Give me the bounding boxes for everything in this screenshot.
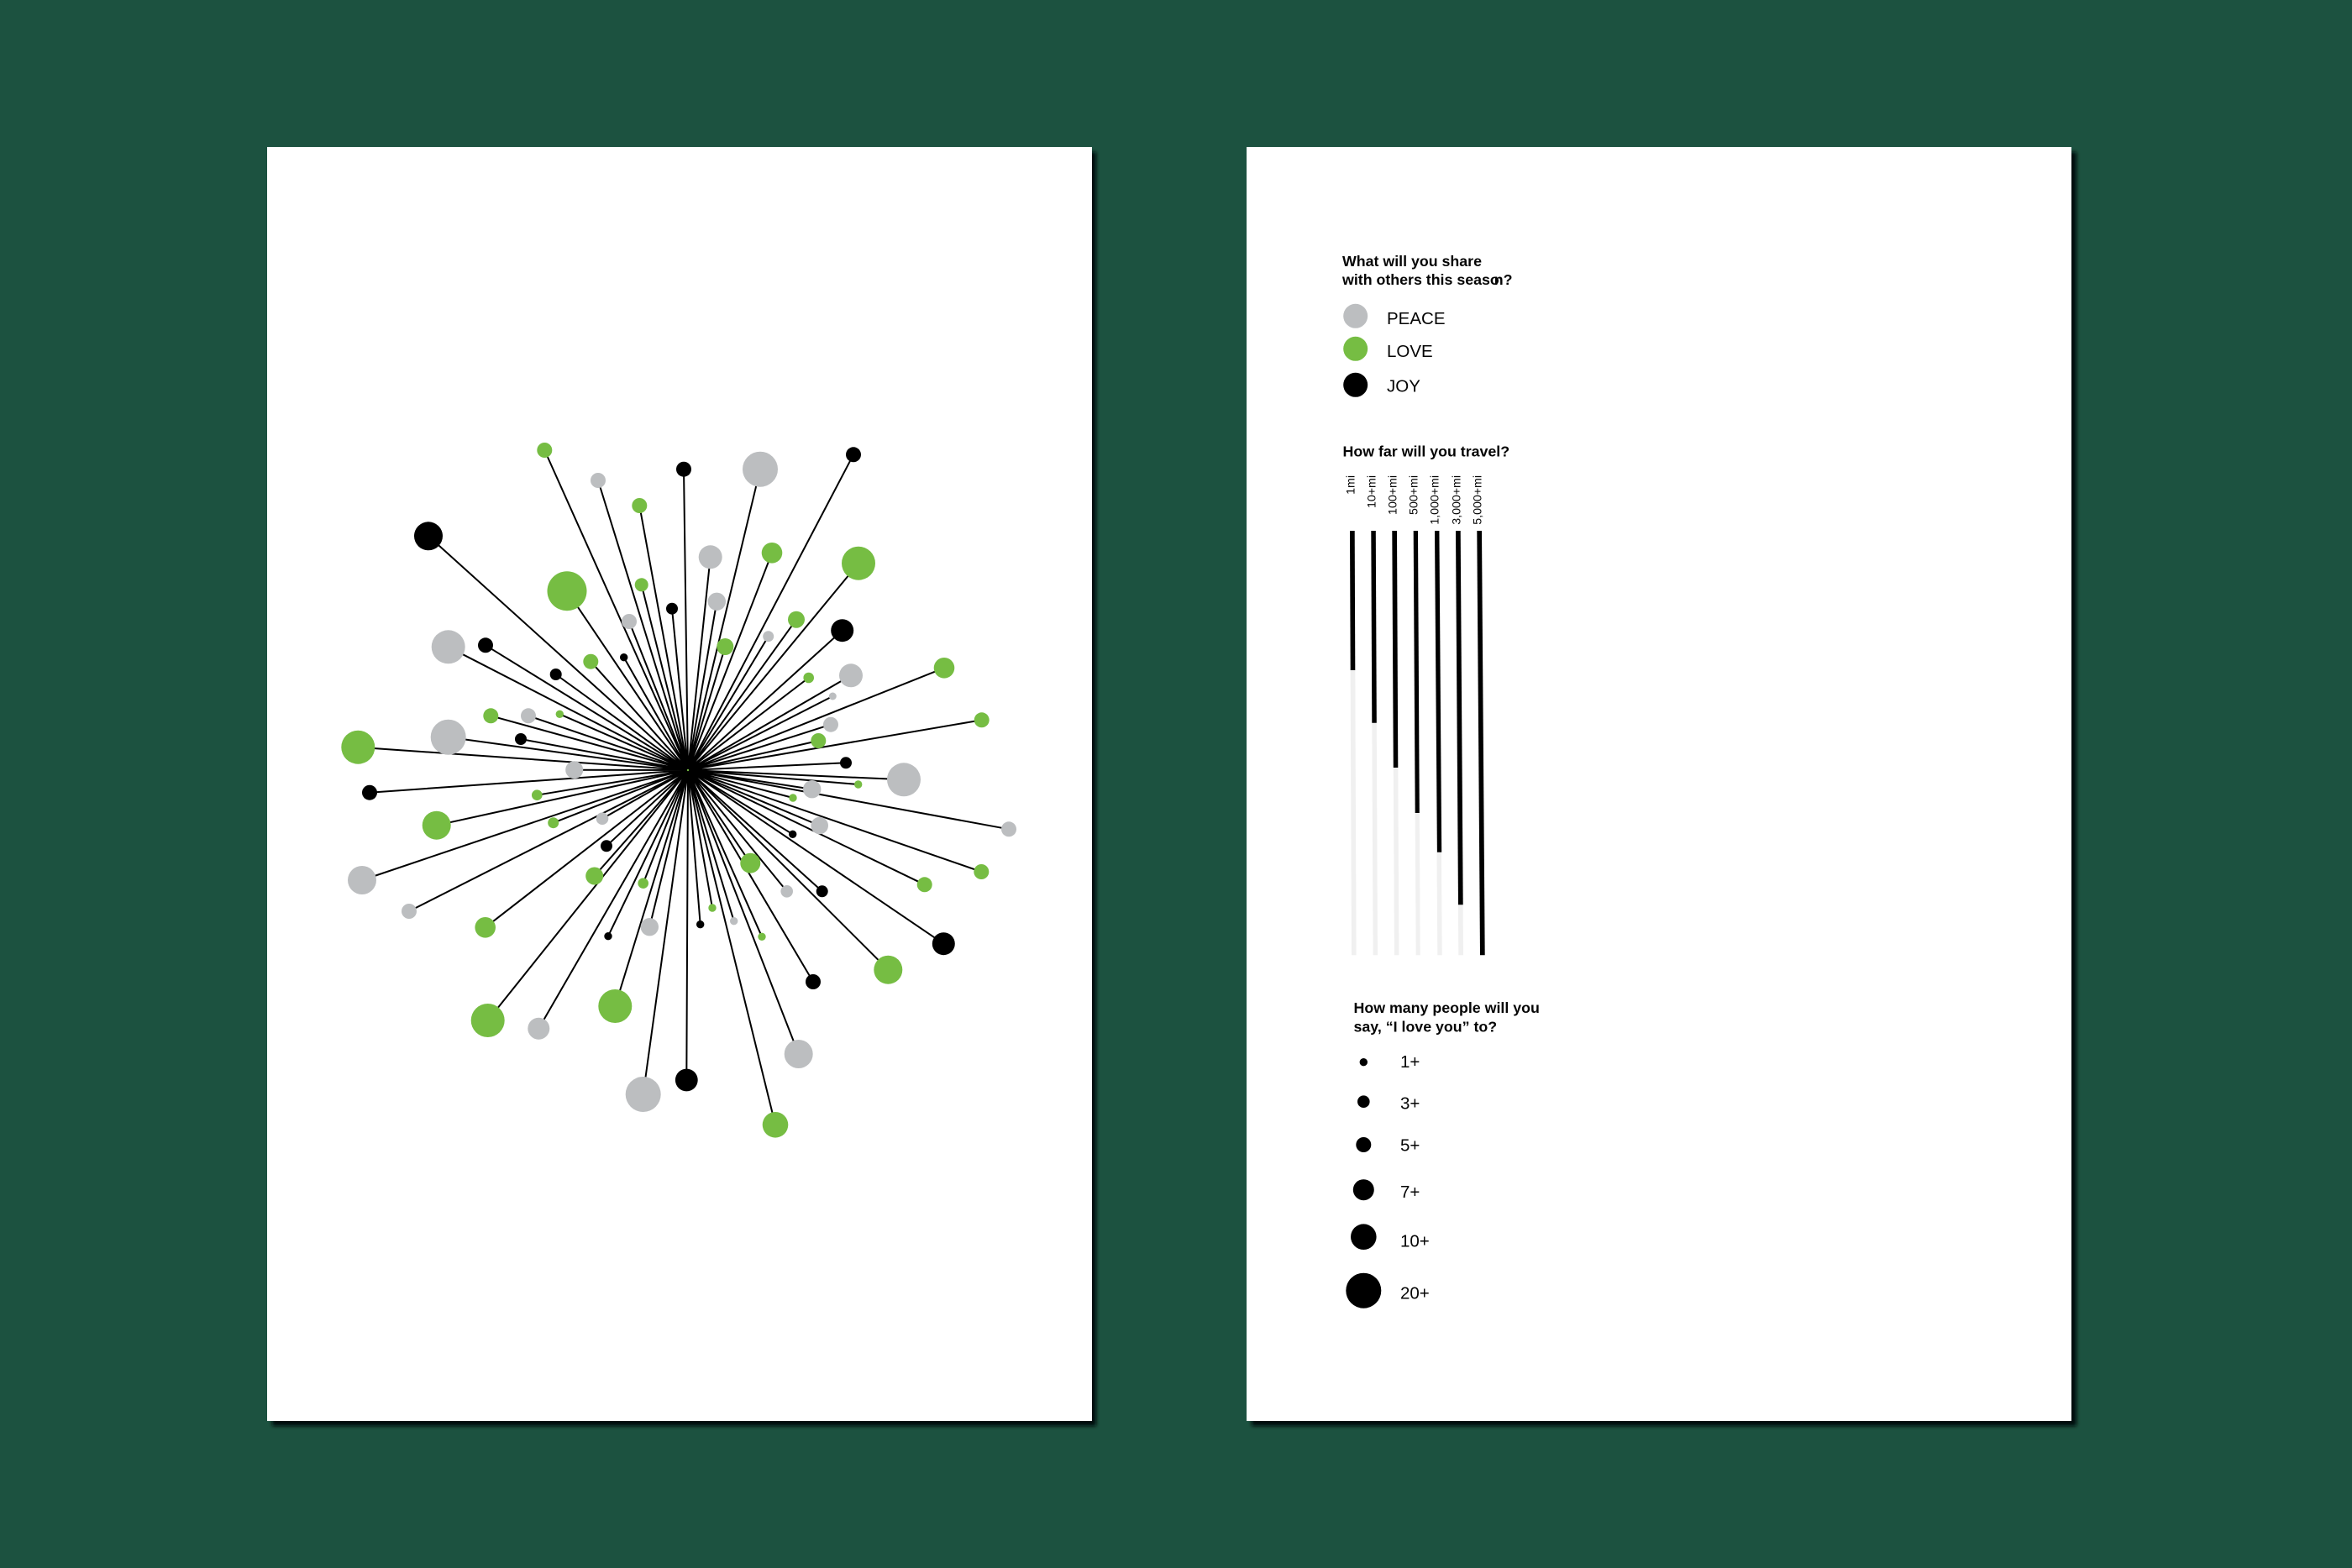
size item: 5+ xyxy=(1356,1136,1420,1156)
size item: 3+: 3+ xyxy=(1400,1093,1420,1113)
legend item: love xyxy=(1343,337,1433,361)
heading: what will you share: n? xyxy=(1494,271,1512,288)
size item: 1+: 1+ xyxy=(1400,1052,1420,1072)
size item: 5+: 5+ xyxy=(1400,1136,1420,1156)
heading: how many people: How many people will you xyxy=(1354,999,1540,1016)
legend item: joy xyxy=(1343,373,1420,397)
distance labels xyxy=(1344,475,1484,525)
heading: how far will you travel: How far will you travel? xyxy=(1342,443,1509,459)
size item: 10+ xyxy=(1351,1224,1430,1251)
distance labels: 500+mi xyxy=(1407,475,1420,515)
size item: 3+ xyxy=(1357,1093,1420,1113)
size item: 7+: 7+ xyxy=(1400,1183,1420,1202)
distance labels: 3,000+mi xyxy=(1450,475,1463,525)
distance labels: 10+mi xyxy=(1365,475,1378,508)
heading: what will you share: What will you share xyxy=(1342,253,1482,270)
legend item: peace xyxy=(1343,304,1445,328)
size item: 7+ xyxy=(1353,1179,1420,1202)
heading: how many people: say, “I love you” to? xyxy=(1354,1018,1497,1035)
distance bars xyxy=(1350,531,1485,955)
distance labels: 100+mi xyxy=(1386,475,1399,515)
panel: right poster legend xyxy=(1247,147,2076,1426)
burst dots xyxy=(341,443,1016,1138)
legend item: peace: PEACE xyxy=(1387,309,1445,328)
legend: how far will you travel xyxy=(1342,443,1509,955)
panel: left poster xyxy=(267,147,1096,1426)
legend item: love: LOVE xyxy=(1387,342,1433,361)
legend: how many people xyxy=(1346,999,1540,1308)
burst lines xyxy=(358,450,1009,1125)
size item: 10+: 10+ xyxy=(1400,1231,1430,1251)
legend item: joy: JOY xyxy=(1387,377,1420,396)
size item: 20+: 20+ xyxy=(1400,1284,1430,1303)
legend: what will you share xyxy=(1341,253,1512,397)
distance labels: 5,000+mi xyxy=(1471,475,1484,525)
distance labels: 1mi xyxy=(1344,475,1357,495)
radial burst chart xyxy=(341,443,1016,1138)
size item: 1+ xyxy=(1360,1052,1420,1072)
size item: 20+ xyxy=(1346,1273,1430,1308)
distance labels: 1,000+mi xyxy=(1428,475,1441,525)
heading: what will you share: with others this seaso xyxy=(1341,271,1499,288)
